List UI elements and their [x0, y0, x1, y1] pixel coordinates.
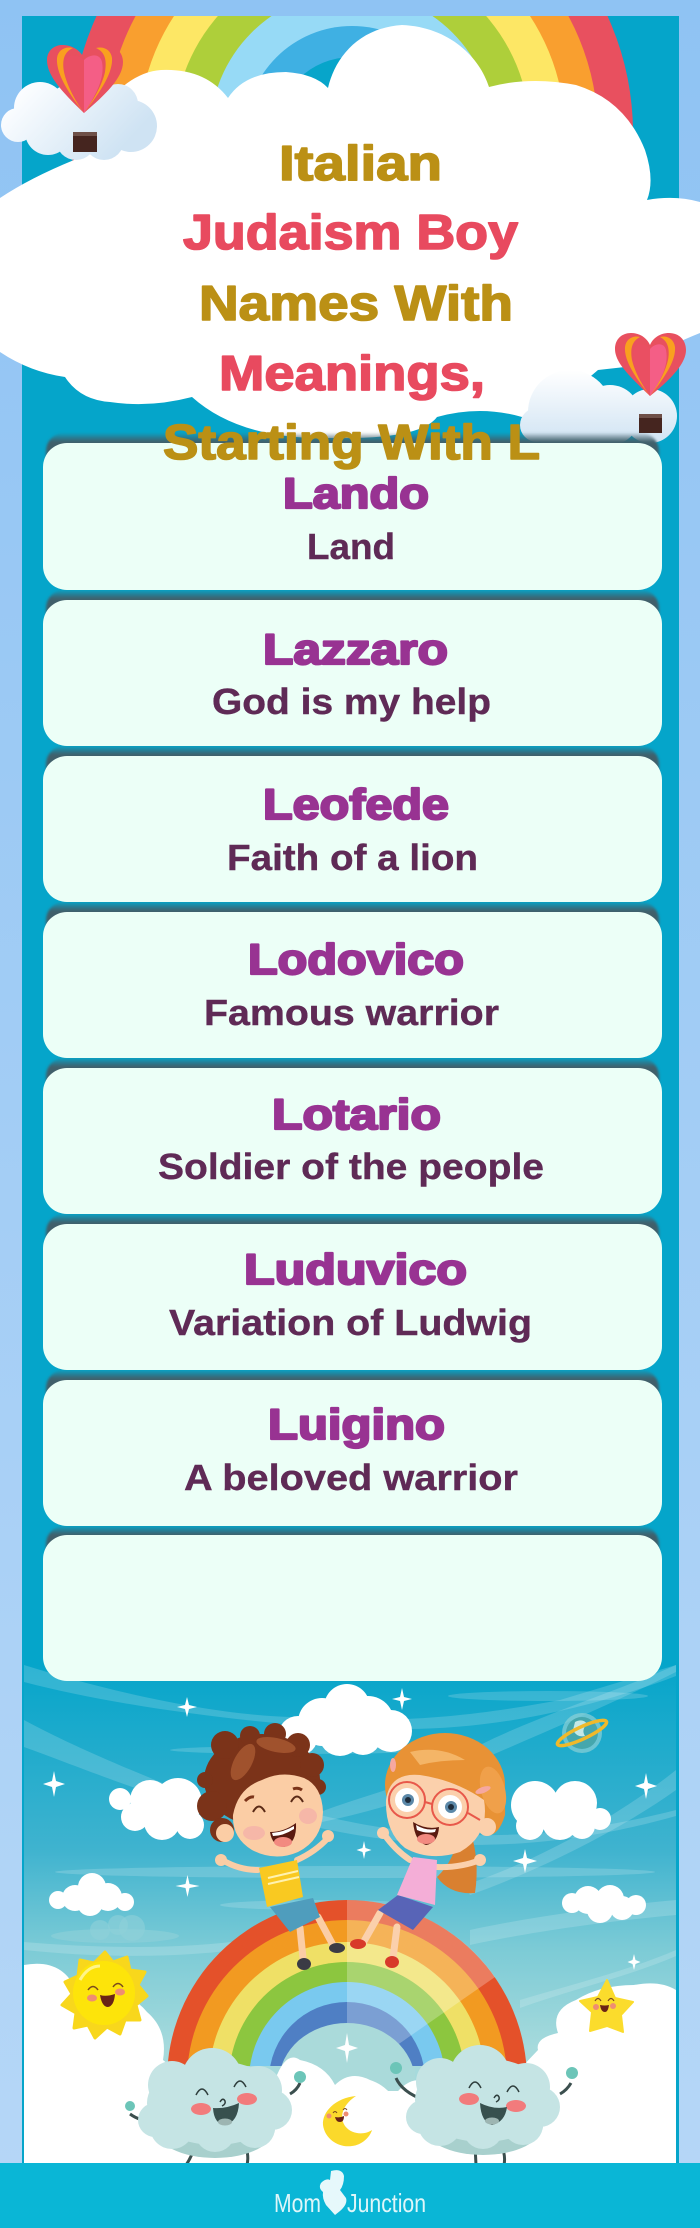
mouth	[413, 1822, 439, 1845]
card 5 text	[158, 1091, 544, 1187]
big white title cloud	[0, 25, 700, 438]
card 5 text: Lotario	[272, 1091, 441, 1139]
logo: Junction	[347, 2188, 426, 2218]
arms	[384, 1834, 480, 1867]
card 5 text: Soldier of the people	[158, 1146, 544, 1187]
shoes	[350, 1939, 366, 1949]
hot air balloon left	[47, 45, 123, 152]
shoes	[297, 1958, 311, 1970]
sun	[62, 1952, 147, 2038]
small cloud top left	[1, 82, 157, 160]
card 6 text: Variation of Ludwig	[169, 1302, 532, 1343]
shorts	[270, 1898, 320, 1932]
card 1 text	[283, 470, 429, 567]
hot air balloon right	[615, 333, 686, 433]
face	[233, 1774, 323, 1857]
smiling cloud right	[390, 2045, 578, 2165]
hair	[197, 1723, 326, 1842]
cloud lower right	[562, 1885, 646, 1923]
card 4 text: Famous warrior	[204, 992, 499, 1033]
face	[386, 1775, 485, 1856]
title: Names With	[199, 277, 513, 331]
arch base cloud	[250, 2058, 450, 2163]
card 6 text	[169, 1246, 532, 1343]
logo: Mom	[274, 2188, 321, 2218]
card shadows	[46, 433, 659, 1566]
dress	[397, 1857, 437, 1905]
cloud right	[511, 1781, 611, 1840]
card 7 text: A beloved warrior	[184, 1457, 518, 1498]
card 3 text: Faith of a lion	[227, 837, 478, 878]
sky clouds	[49, 1684, 646, 1923]
legs	[300, 1917, 333, 1958]
logo	[274, 2170, 426, 2218]
skirt	[378, 1895, 433, 1930]
smiling cloud left	[125, 2048, 306, 2165]
name cards	[43, 443, 662, 1681]
card 2 text: God is my help	[212, 681, 491, 722]
legs	[363, 1913, 397, 1958]
card 2 text: Lazzaro	[263, 626, 448, 674]
star	[580, 1980, 633, 2032]
title: Judaism Boy	[183, 206, 518, 260]
sparkles	[43, 1688, 657, 1970]
card 3 text	[227, 781, 478, 878]
bottom rainbow	[168, 1900, 526, 2091]
boy sitting on rainbow	[197, 1723, 345, 1970]
legs and arms	[130, 2083, 300, 2165]
faint teal cloud	[51, 1915, 179, 1943]
arms	[224, 1838, 328, 1870]
card 6 text: Luduvico	[244, 1246, 467, 1294]
cloud left	[109, 1778, 204, 1840]
cloud top centre	[278, 1684, 412, 1756]
title: Starting With L	[163, 416, 540, 470]
card 3 text: Leofede	[263, 781, 449, 829]
card 1 text: Land	[307, 526, 395, 567]
scenery sky	[24, 1665, 676, 2080]
card 4 text	[204, 936, 499, 1033]
title: Meanings,	[219, 347, 485, 401]
card 7 text: Luigino	[268, 1401, 445, 1449]
top rainbow	[72, 16, 633, 161]
title	[163, 137, 540, 470]
small cloud bottom right	[520, 370, 677, 454]
legs and arms	[396, 2078, 571, 2165]
girl sitting on rainbow	[350, 1733, 511, 1968]
hair	[385, 1733, 505, 1837]
cloud lower left	[49, 1873, 134, 1916]
long hair	[437, 1830, 477, 1893]
sparkle under the arch	[336, 2033, 358, 2063]
planet	[555, 1713, 609, 1753]
hair highlights	[226, 1734, 297, 1784]
footer bar	[0, 2163, 700, 2228]
shirt	[259, 1860, 303, 1907]
card 7 text	[184, 1401, 518, 1498]
logo icon: mother and heart	[320, 2170, 346, 2215]
card 1 text: Lando	[283, 470, 429, 518]
moon	[323, 2096, 372, 2146]
glasses and eyes	[395, 1788, 419, 1812]
card 4 text: Lodovico	[248, 936, 464, 984]
card 2 text	[212, 626, 491, 722]
title: Italian	[279, 137, 442, 191]
bottom white cloud bank	[24, 1964, 676, 2163]
